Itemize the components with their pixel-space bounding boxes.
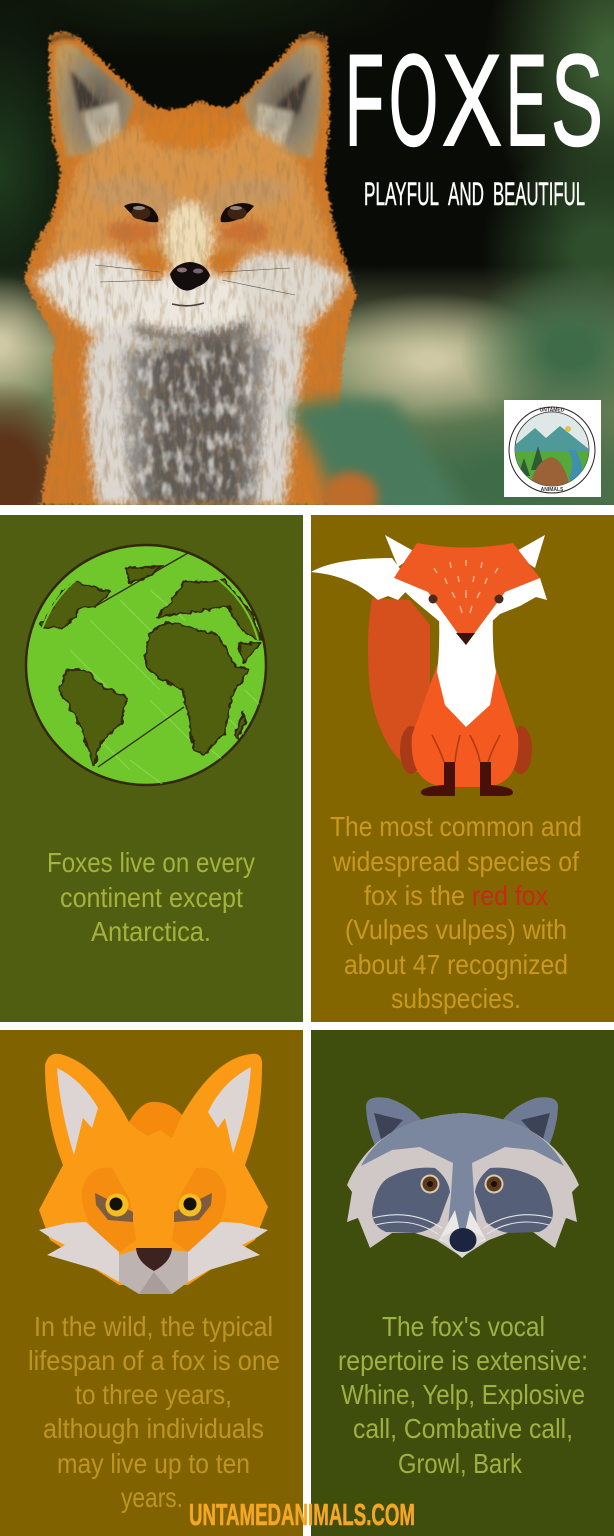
subtitle — [364, 176, 585, 212]
habitat text — [47, 847, 255, 947]
lifespan text — [28, 1311, 280, 1513]
panel: habitat — [0, 515, 303, 1022]
hero photo: red fox portrait — [0, 0, 614, 505]
icon: orange fox head — [39, 1054, 268, 1294]
icon: raccoon face — [347, 1097, 579, 1258]
title: F — [345, 27, 384, 173]
vocal text: Growl, Bark — [398, 1448, 522, 1479]
title — [345, 27, 603, 173]
species text: widespread species of — [332, 846, 579, 877]
species text: (Vulpes vulpes) with — [345, 914, 567, 945]
vocal text — [338, 1311, 588, 1479]
lifespan text: years. — [121, 1482, 183, 1513]
vocal text: call, Combative call, — [353, 1413, 573, 1444]
fox body and head — [20, 30, 382, 505]
habitat text: Antarctica. — [91, 916, 211, 947]
lifespan text: may live up to ten — [57, 1448, 250, 1479]
species text: The most common and — [330, 811, 582, 842]
lifespan text: to three years, — [75, 1379, 232, 1410]
subtitle: AND — [448, 176, 484, 212]
icon: sitting red fox — [311, 535, 547, 796]
panel: vocal repertoire — [311, 1030, 614, 1536]
vocal text: The fox's vocal — [382, 1311, 545, 1342]
habitat text: continent except — [60, 882, 243, 913]
fur streak texture — [20, 30, 360, 505]
habitat text: Foxes live on every — [47, 847, 255, 878]
vocal text: repertoire is extensive: — [338, 1345, 588, 1376]
lifespan text: lifespan of a fox is one — [28, 1345, 280, 1376]
logo badge — [504, 400, 601, 497]
panel: red fox species — [311, 515, 614, 1022]
species text: about 47 recognized — [344, 949, 568, 980]
vocal text: Whine, Yelp, Explosive — [341, 1379, 585, 1410]
face fur — [34, 114, 348, 505]
lifespan text: In the wild, the typical — [34, 1311, 273, 1342]
logo badge: ANIMALS — [541, 487, 564, 493]
logo badge: UNTAMED — [540, 408, 565, 414]
eyes — [124, 203, 254, 222]
species text — [330, 811, 582, 1014]
subtitle: PLAYFUL — [364, 176, 439, 212]
title: X — [442, 27, 502, 173]
nose and mouth — [95, 262, 295, 306]
panel: lifespan — [0, 1030, 303, 1536]
icon: globe — [26, 545, 266, 790]
title: E — [506, 27, 547, 173]
chest mottling — [121, 335, 272, 505]
ears — [50, 36, 326, 162]
foreground foliage — [288, 398, 470, 515]
species text: red fox — [472, 880, 548, 911]
website watermark: UNTAMEDANIMALS.COM — [189, 1497, 415, 1532]
species text: subspecies. — [391, 983, 521, 1014]
species text: fox is the — [364, 880, 465, 911]
lifespan text: although individuals — [43, 1413, 264, 1444]
title: O — [389, 27, 438, 173]
